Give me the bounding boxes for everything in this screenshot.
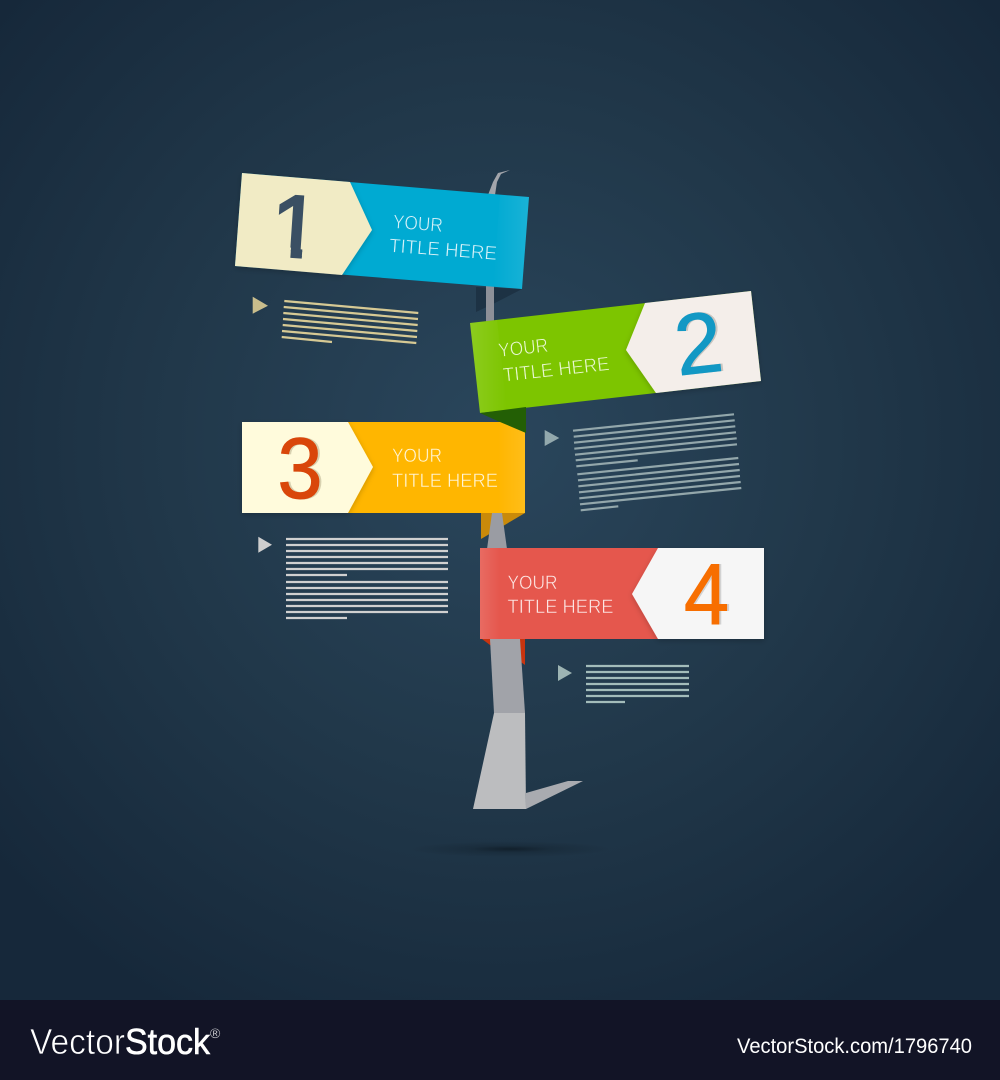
number 3: 3: [278, 421, 322, 517]
sign 1 title: YOUR: [392, 211, 444, 237]
sign 3 title: TITLE HERE: [392, 470, 498, 492]
sign 3: [242, 421, 525, 517]
bullet triangle 4: [558, 665, 572, 681]
sign 2 white number panel: [626, 291, 761, 393]
pole: base: [473, 713, 526, 809]
sign 3 cream number panel: [242, 422, 373, 513]
number 2: 2: [670, 294, 727, 394]
sign 2: [470, 291, 761, 413]
pole: shaft: [490, 639, 525, 713]
sign 4 red ribbon: [480, 548, 764, 639]
ribbon fold: sign 4 red: [482, 639, 525, 665]
sign 3 amber ribbon: [242, 422, 525, 513]
sign 1 cream number panel: [235, 173, 372, 275]
sign 2 title: YOUR: [497, 335, 549, 362]
bullet triangle 1: [253, 297, 268, 314]
text lines 1: [282, 301, 418, 343]
ribbon fold: sign 3 amber: [481, 513, 525, 539]
sign 4: [480, 547, 764, 643]
sign 4 white number panel: [632, 548, 764, 639]
pole: upper section: [486, 285, 494, 327]
text lines 3: [286, 539, 448, 618]
sign 4 edge highlight: [480, 548, 500, 639]
sign 1 title: TITLE HERE: [388, 235, 498, 265]
signpost pole: [473, 170, 583, 809]
sign 1: [235, 173, 529, 289]
text block 1: [253, 297, 418, 343]
sign 4 title: TITLE HERE: [508, 596, 614, 618]
footer logo: [30, 1021, 221, 1062]
sign 1 blue ribbon: [235, 173, 529, 289]
footer logo: Vector: [30, 1021, 125, 1062]
text lines 2: [573, 414, 741, 510]
number 1: 1: [268, 175, 323, 277]
sign 2 title: TITLE HERE: [502, 353, 611, 387]
pole: middle section: [487, 513, 507, 549]
ribbon fold: sign 1 shadow: [476, 287, 522, 312]
footer image id: VectorStock.com/1796740: [737, 1035, 972, 1058]
sign 3 title: [392, 445, 498, 492]
ribbon fold: sign 2 green: [480, 407, 526, 433]
footer background: [0, 1000, 1000, 1080]
bullet triangle 3: [258, 537, 272, 553]
pole: top tip: [488, 170, 510, 195]
footer logo: ®: [210, 1025, 221, 1041]
sign 2 green ribbon: [470, 291, 761, 413]
number 4: 4: [686, 547, 731, 643]
text block 3: [258, 537, 448, 618]
sign 2 title: [497, 328, 611, 387]
sign 3 title: YOUR: [392, 445, 442, 467]
footer bar: [0, 1000, 1000, 1080]
text block 4: [558, 665, 689, 702]
number 3: 3: [280, 421, 324, 517]
footer logo: Stock: [125, 1021, 211, 1062]
sign 3 edge highlight: [498, 422, 525, 513]
text block 2: [545, 414, 741, 510]
text lines 4: [586, 666, 689, 702]
sign 4 title: [508, 572, 614, 618]
ground shadow: [410, 841, 610, 857]
number 2: 2: [672, 293, 729, 394]
bullet triangle 2: [545, 430, 559, 446]
pole: foot: [526, 781, 583, 809]
number 4: 4: [684, 547, 729, 643]
sign 1 edge highlight: [493, 195, 529, 289]
sign 1 title: [388, 211, 499, 265]
sign 2 edge highlight: [470, 320, 507, 413]
sign 4 title: YOUR: [508, 572, 558, 594]
